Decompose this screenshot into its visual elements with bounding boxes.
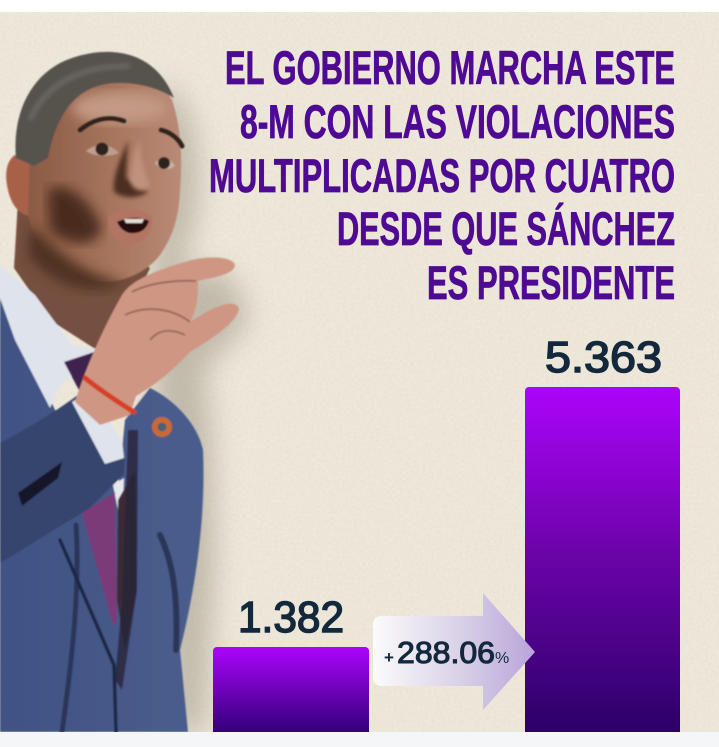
lapel lines and folds [60,525,176,732]
shirt collar [0,265,105,408]
red wristband [85,378,134,412]
nose shadow [114,140,148,197]
value: 5.363: 5.363 [545,333,662,382]
hand [75,257,239,425]
title [209,41,675,309]
mouth [108,211,152,243]
increase percentage: + [384,648,394,667]
eyebrows [80,118,182,146]
nose highlight [130,140,150,190]
eyes [86,142,175,169]
increase percentage: % [495,650,509,667]
increase percentage: 288.06 [397,635,495,670]
face [28,79,181,282]
portrait drop shadow [150,80,250,732]
bar chart [213,333,680,732]
suit jacket [0,295,203,732]
sleeve [0,395,125,563]
cheek shadow [48,187,102,243]
arrow: increase [373,593,535,710]
value: 1.382: 1.382 [238,593,344,642]
finger creases [125,281,196,340]
ear [6,153,32,216]
cuff [72,392,124,464]
bar: 5.363 [525,387,680,732]
lapel pin [152,417,172,437]
lapel dark edge [115,430,138,690]
jaw shadow [28,225,125,290]
sleeve buttons [18,462,62,506]
tie [82,492,117,625]
forehead highlight [72,92,168,124]
hair highlights [30,66,130,120]
shirt sliver [112,477,126,510]
bar: 1.382 [213,647,369,732]
tie knot [64,352,94,390]
neck [14,200,150,352]
shirt gap [117,470,137,650]
bottom strip [0,732,719,747]
hair [15,52,174,166]
portrait: man in a blue suit gesturing [0,52,250,732]
